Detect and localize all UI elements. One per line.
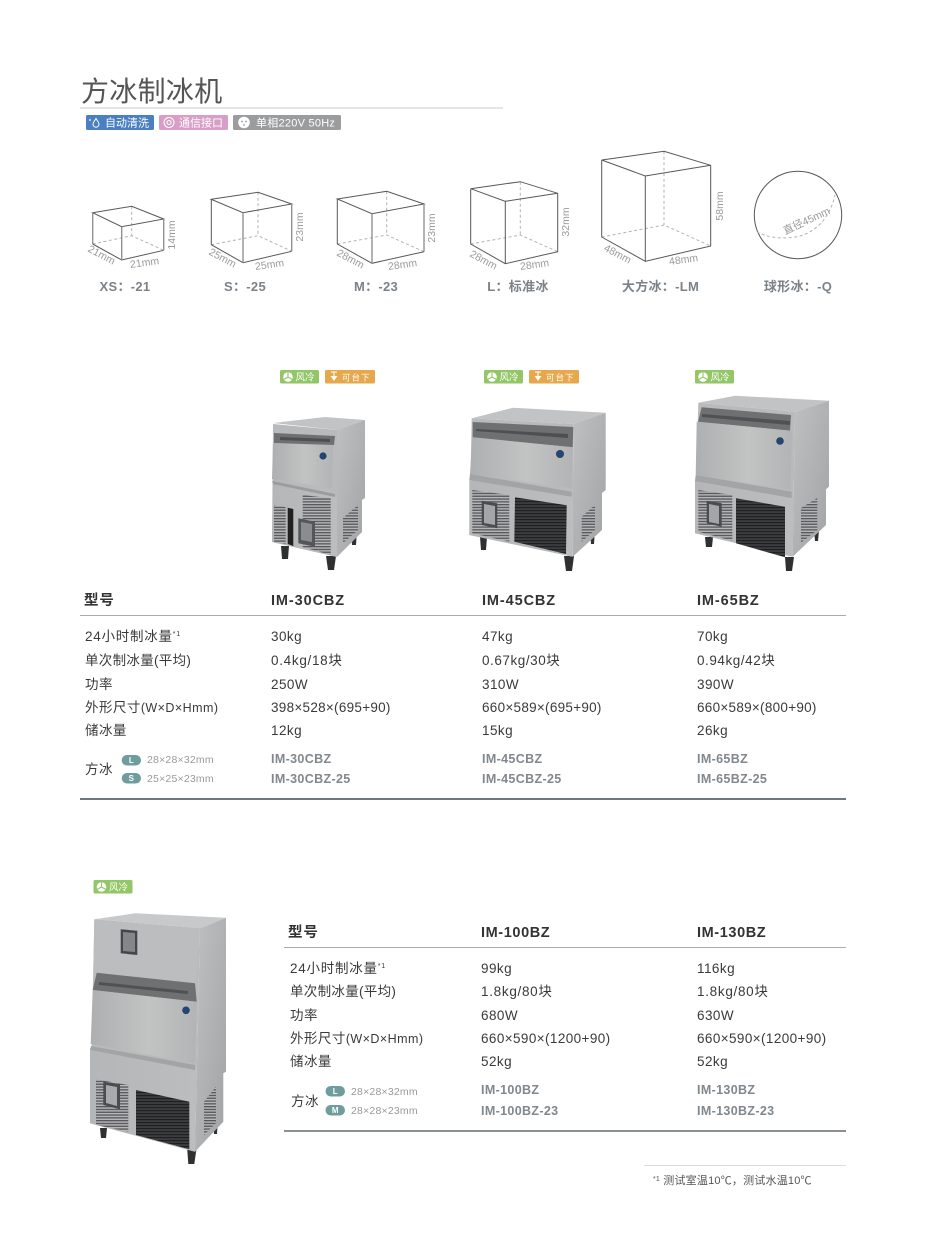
cube L (468, 182, 572, 294)
tag: undercounter IM-30CBZ: 可台下 (342, 372, 371, 382)
feature badges (86, 115, 341, 130)
row: 24h output: *1 (173, 631, 181, 638)
row: 24h output: 47kg (482, 629, 513, 644)
row: 24h output (290, 961, 735, 976)
footnote (644, 1165, 846, 1187)
row: per batch: 0.94kg/42块 (697, 653, 775, 668)
table header: 型号 (288, 924, 319, 941)
row: per batch: 1.8kg/80块 (697, 984, 769, 999)
row: cube ice models: S (129, 774, 135, 783)
row: dimensions: 398×528×(695+90) (271, 700, 391, 715)
machine IM-30CBZ (272, 417, 365, 570)
row: cube ice models: IM-30CBZ (271, 752, 331, 766)
row: power (290, 1007, 734, 1023)
tag: air cooled IM-45CBZ: 风冷 (500, 372, 519, 384)
row: 24h output: 70kg (697, 629, 728, 644)
row: storage: 52kg (481, 1054, 512, 1069)
row: 24h output: 24小时制冰量 (85, 629, 173, 644)
row: 24h output: 30kg (271, 629, 302, 644)
cube M: 28mm (387, 257, 418, 273)
row: power: 390W (697, 677, 734, 692)
table header: IM-30CBZ (271, 593, 345, 609)
cube LM: 58mm (714, 191, 726, 221)
row: cube ice models: IM-130BZ-23 (697, 1104, 774, 1118)
row: storage: 52kg (697, 1054, 728, 1069)
tag: air cooled IM-100BZ: 风冷 (109, 882, 129, 894)
tag: air cooled IM-30CBZ (280, 370, 319, 384)
cube LM: 48mm (602, 242, 633, 267)
badge: power (233, 115, 341, 130)
cube XS: 21mm (129, 255, 160, 271)
row: cube ice models: 28×28×23mm (351, 1105, 418, 1117)
row: cube ice models: IM-45CBZ (482, 752, 542, 766)
row: power (85, 676, 734, 692)
cube XS: 14mm (166, 220, 178, 250)
row: cube ice models: 方冰 (85, 762, 113, 777)
row: per batch (290, 984, 769, 999)
cube M: 23mm (426, 213, 438, 243)
row: storage (85, 723, 728, 738)
cube M: M：-23 (354, 279, 398, 294)
row: power: 630W (697, 1008, 734, 1023)
cube L: 28mm (519, 257, 550, 273)
row: dimensions: 660×589×(800+90) (697, 700, 817, 715)
cube L: L：标准冰 (487, 279, 549, 294)
sphere Q (754, 171, 842, 294)
row: per batch: 单次制冰量(平均) (85, 653, 191, 668)
cube XS: XS：-21 (100, 279, 150, 294)
row: storage: 15kg (482, 723, 513, 738)
table: IM-100BZ, IM-130BZ (284, 924, 846, 1132)
tag: air cooled IM-100BZ (94, 880, 132, 894)
cube L: 28mm (468, 248, 499, 273)
machine IM-45CBZ (469, 408, 606, 571)
badge: power: 单相220V 50Hz (256, 116, 335, 130)
row: dimensions (290, 1031, 827, 1046)
table header (284, 924, 846, 948)
row: per batch: 0.4kg/18块 (271, 653, 343, 668)
row: dimensions (85, 700, 817, 715)
tag: air cooled IM-65BZ: 风冷 (710, 372, 730, 384)
row: cube ice models: 28×28×32mm (351, 1086, 418, 1098)
badge: auto clean: 自动清洗 (105, 116, 149, 130)
row: 24h output (85, 629, 728, 644)
row: storage: 储冰量 (290, 1054, 332, 1069)
row: cube ice models (291, 1083, 774, 1118)
table: IM-30CBZ, IM-45CBZ, IM-65BZ (80, 592, 846, 800)
row: power: 功率 (290, 1007, 318, 1023)
row: cube ice models: IM-130BZ (697, 1083, 755, 1097)
cube L: 32mm (560, 207, 572, 237)
cube S: S：-25 (224, 279, 266, 294)
cube LM: 48mm (668, 252, 699, 268)
row: 24h output: 99kg (481, 961, 512, 976)
row: dimensions: 外形尺寸(W×D×Hmm) (85, 700, 218, 715)
machine IM-100BZ (90, 913, 226, 1164)
cube LM (602, 151, 726, 294)
ice shape diagrams (86, 151, 842, 294)
tag: undercounter IM-45CBZ: 可台下 (546, 372, 575, 382)
row: power: 功率 (85, 676, 113, 692)
cube LM: 大方冰：-LM (622, 279, 699, 294)
row: storage: 12kg (271, 723, 302, 738)
row: cube ice models: IM-45CBZ-25 (482, 772, 562, 786)
table header (80, 592, 846, 616)
cube XS (86, 206, 178, 294)
sphere Q: 直径45mm (781, 204, 832, 237)
cube S (207, 192, 306, 294)
row: cube ice models: 25×25×23mm (147, 773, 214, 785)
table header: IM-130BZ (697, 925, 766, 941)
row: storage: 储冰量 (85, 723, 127, 738)
row: per batch: 单次制冰量(平均) (290, 984, 396, 999)
sphere Q: 球形冰：-Q (764, 279, 832, 294)
table header: 型号 (84, 592, 115, 609)
row: storage: 26kg (697, 723, 728, 738)
row: dimensions: 660×590×(1200+90) (697, 1031, 827, 1046)
table header: IM-65BZ (697, 593, 760, 609)
row: cube ice models (85, 752, 767, 786)
title: 方冰制冰机 (81, 76, 223, 107)
badge: communication port: 通信接口 (179, 116, 223, 130)
row: cube ice models: IM-100BZ-23 (481, 1104, 558, 1118)
feature tags: first row (280, 370, 734, 384)
table header: IM-100BZ (481, 925, 550, 941)
row: cube ice models: IM-65BZ (697, 752, 748, 766)
cube S: 25mm (207, 246, 238, 271)
tag: air cooled IM-65BZ (695, 370, 734, 384)
row: 24h output: *1 (378, 963, 386, 970)
row: cube ice models: L (333, 1087, 338, 1096)
row: cube ice models: IM-30CBZ-25 (271, 772, 351, 786)
cube S: 25mm (254, 257, 285, 273)
tag: undercounter IM-30CBZ (325, 370, 375, 384)
row: 24h output: 116kg (697, 961, 735, 976)
row: dimensions: 660×589×(695+90) (482, 700, 602, 715)
cube XS: 21mm (86, 243, 117, 268)
cube M: 28mm (335, 247, 366, 272)
row: cube ice models: 方冰 (291, 1094, 319, 1109)
tag: air cooled IM-30CBZ: 风冷 (296, 372, 315, 384)
row: cube ice models: IM-100BZ (481, 1083, 539, 1097)
row: cube ice models: IM-65BZ-25 (697, 772, 767, 786)
row: cube ice models: L (129, 756, 134, 765)
machine IM-65BZ (695, 396, 829, 571)
row: power: 310W (482, 677, 519, 692)
table header: IM-45CBZ (482, 593, 556, 609)
row: cube ice models: M (332, 1106, 339, 1115)
row: 24h output: 24小时制冰量 (290, 961, 378, 976)
badge: communication port (159, 115, 228, 130)
row: per batch: 1.8kg/80块 (481, 984, 553, 999)
row: per batch (85, 653, 775, 668)
tag: undercounter IM-45CBZ (529, 370, 579, 384)
badge: auto clean (86, 115, 154, 130)
row: storage (290, 1054, 728, 1069)
tag: air cooled IM-45CBZ (484, 370, 523, 384)
cube S: 23mm (294, 212, 306, 242)
row: per batch: 0.67kg/30块 (482, 653, 560, 668)
row: dimensions: 外形尺寸(W×D×Hmm) (290, 1031, 423, 1046)
footnote: 测试室温10℃，测试水温10℃ (660, 1173, 812, 1187)
row: power: 680W (481, 1008, 518, 1023)
row: cube ice models: 28×28×32mm (147, 754, 214, 766)
cube M (335, 191, 438, 294)
row: dimensions: 660×590×(1200+90) (481, 1031, 611, 1046)
row: power: 250W (271, 677, 308, 692)
footnote: *1 (653, 1176, 660, 1183)
